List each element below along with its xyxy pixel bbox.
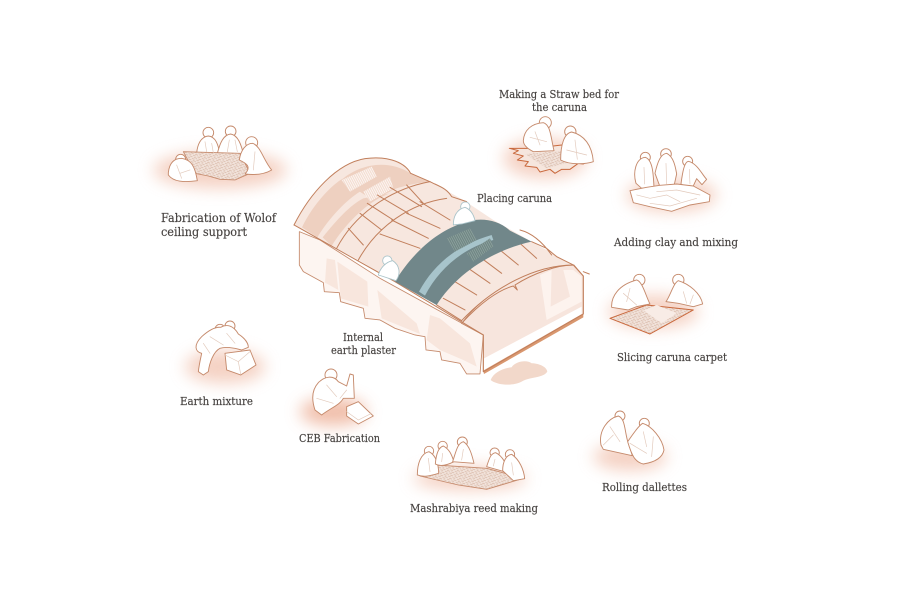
green caruna section bbox=[395, 220, 532, 305]
roof outline and arches bbox=[294, 158, 430, 225]
label: Slicing caruna carpet: Slicing caruna carpet bbox=[617, 351, 727, 364]
label: Rolling dallettes: Rolling dallettes bbox=[602, 481, 687, 494]
right roof sections bbox=[437, 242, 573, 321]
label: Mashrabiya reed making: Mashrabiya reed making bbox=[410, 502, 538, 515]
label: Making a Straw bed: Making a Straw bed for bbox=[499, 88, 620, 101]
label: Fabrication of Wolof ceiling support: ceiling support bbox=[161, 225, 247, 239]
figure: earth mixture bbox=[185, 321, 265, 383]
figure: fabrication of Wolof ceiling support bbox=[153, 126, 287, 188]
figure: CEB fabrication bbox=[300, 369, 373, 426]
figure: adding clay and mixing bbox=[627, 149, 717, 212]
left arch bands bbox=[302, 178, 360, 237]
label: Internal earth plaster: Internal bbox=[343, 331, 383, 344]
label: Making a Straw bed bbox=[499, 88, 620, 114]
label: Fabrication of Wolof ceiling support: Fabrication of Wolof bbox=[161, 211, 277, 225]
figure: making a straw bed bbox=[503, 117, 593, 178]
figure: rolling dallettes bbox=[593, 411, 667, 471]
roof ribs bbox=[348, 185, 450, 248]
earth pile bbox=[491, 361, 547, 385]
roof base bbox=[294, 158, 573, 321]
worker figure: lower left bbox=[378, 256, 399, 281]
figure: slicing caruna carpet bbox=[608, 274, 703, 334]
label: CEB Fabrication: CEB Fabrication bbox=[299, 432, 380, 445]
central vaulted building bbox=[294, 158, 589, 385]
worker figure: upper right bbox=[453, 202, 475, 225]
end arch bbox=[462, 265, 583, 372]
label: Placing caruna: Placing caruna bbox=[477, 192, 552, 205]
label: Earth mixture: Earth mixture bbox=[180, 395, 253, 408]
label: Making a Straw bed: the caruna bbox=[532, 101, 587, 114]
label: Fabrication of Wolof ceiling support bbox=[161, 211, 277, 239]
figures: straw bed, clay and carpet bbox=[503, 117, 717, 334]
label: Internal earth plaster: earth plaster bbox=[331, 344, 397, 357]
front long wall bbox=[299, 232, 483, 374]
label: Internal earth plaster bbox=[331, 331, 397, 357]
end wall highlights bbox=[484, 307, 582, 370]
figures: earth mixture and CEB fabrication bbox=[185, 321, 373, 426]
wall buttresses bbox=[325, 258, 477, 367]
figures: Mashrabiya and rolling bbox=[413, 411, 667, 490]
figure: Mashrabiya reed making bbox=[413, 437, 527, 490]
end wall interior bbox=[462, 265, 583, 372]
label: Adding clay and mixing: Adding clay and mixing bbox=[613, 236, 738, 249]
